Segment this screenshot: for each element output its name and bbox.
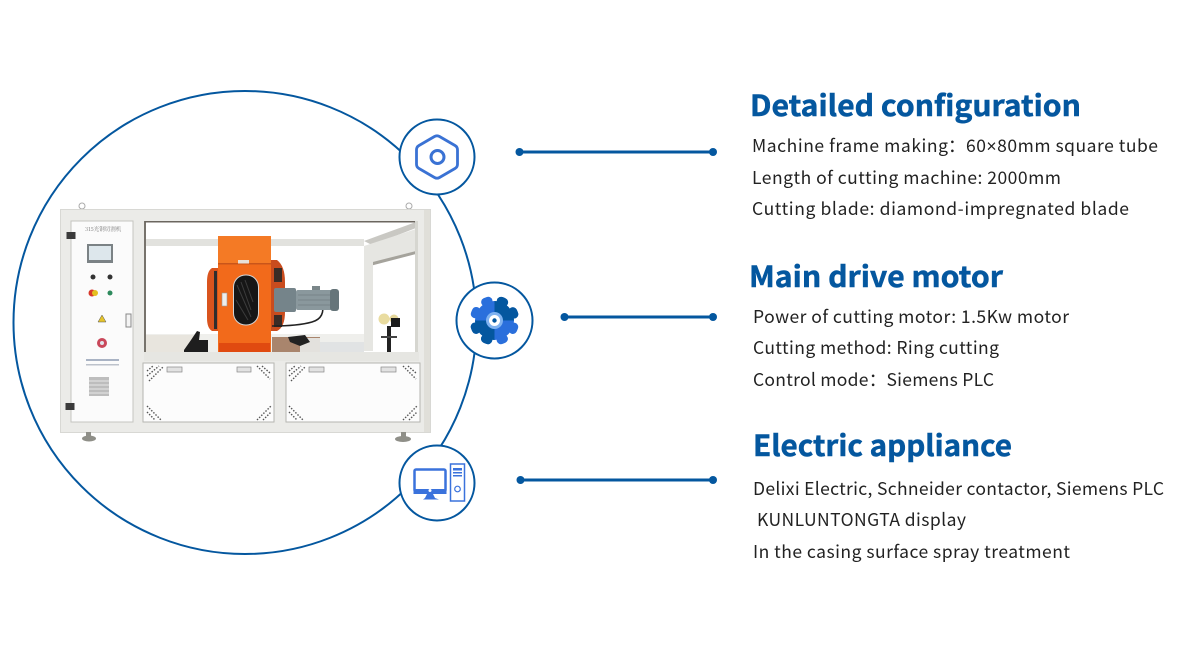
text block: electrical details: Delixi Electric, Schneider contactor, Siemens PLC	[753, 476, 1164, 501]
text block: motor details: Control mode：Siemens PLC	[753, 367, 994, 392]
control cabinet door	[66, 221, 133, 422]
text block: configuration details: ：	[948, 133, 966, 158]
icon: puzzle gear	[456, 282, 532, 358]
text block: motor details	[753, 304, 1069, 392]
text block: electrical details: In the casing surface spray treatment	[753, 539, 1070, 564]
machine frame	[60, 203, 430, 432]
icon: hexagon nut	[400, 120, 474, 194]
lower left panel	[143, 363, 274, 422]
orange ring cutter	[207, 236, 285, 352]
grey motor and gearbox	[272, 286, 339, 326]
text block: configuration details: 60×80mm square tube	[966, 133, 1158, 158]
machine photo: cutting machine	[60, 203, 430, 442]
lower right panel	[286, 363, 420, 422]
machine feet	[82, 432, 411, 442]
text block: configuration details: Machine frame making	[752, 133, 948, 158]
icon: desktop computer	[400, 446, 474, 520]
cabinet title: 315光钢切割机	[85, 225, 122, 233]
text block: configuration details	[752, 133, 1158, 221]
clutter on machine bed	[146, 331, 364, 352]
text block: motor details: Cutting method: Ring cutting	[753, 335, 999, 360]
text block: motor details: Power of cutting motor: 1.5Kw motor	[753, 304, 1069, 329]
heading: Electric appliance: Electric appliance	[753, 423, 1012, 465]
connector line 3	[516, 476, 717, 484]
text block: configuration details: Cutting blade: diamond-impregnated blade	[752, 196, 1129, 221]
text block: electrical details: KUNLUNTONGTA display	[757, 507, 966, 532]
heading: Detailed configuration: Detailed configuration	[750, 83, 1081, 125]
heading: Main drive motor: Main drive motor	[749, 254, 1003, 296]
connector line 1	[516, 148, 717, 156]
connector line 2	[560, 313, 717, 321]
text block: configuration details: Length of cutting machine: 2000mm	[752, 165, 1061, 190]
support roller stand	[378, 314, 400, 352]
large circle outline	[14, 91, 476, 554]
text block: electrical details	[753, 476, 1164, 564]
